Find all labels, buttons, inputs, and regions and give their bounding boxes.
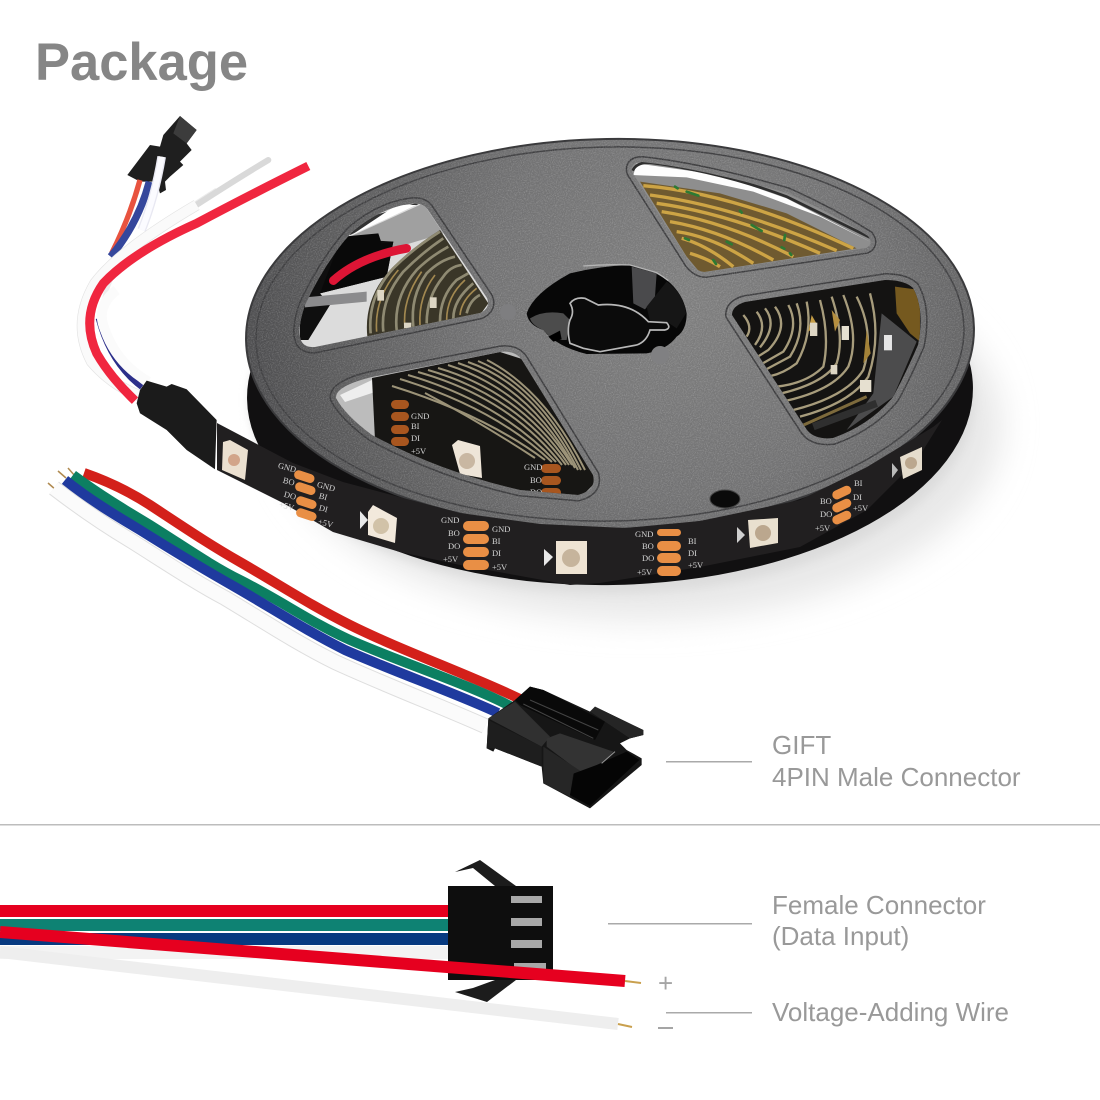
mounting hole <box>710 490 740 508</box>
strip solder pads and labels: GND <box>277 460 297 475</box>
strip solder pads and labels: GND <box>492 524 510 534</box>
strip solder pads and labels: BO <box>820 496 832 506</box>
wires <box>48 468 520 726</box>
strip solder pads and labels: DI <box>492 548 501 558</box>
strip solder pads and labels: DI <box>853 492 862 502</box>
inner strip pads: DI <box>411 433 420 443</box>
inner LED <box>452 440 482 478</box>
callout: male connector: 4PIN Male Connector <box>772 762 1021 792</box>
window: right <box>732 280 921 438</box>
strip solder pads and labels: GND <box>635 529 653 539</box>
inner strip pads: GND <box>411 411 429 421</box>
callout: female connector <box>608 890 986 951</box>
strip solder pads and labels: BI <box>854 478 863 488</box>
callout: male connector <box>666 730 1021 792</box>
strip solder pads and labels: +5V <box>492 562 508 572</box>
connector housing <box>448 860 553 1002</box>
reel body <box>244 195 976 591</box>
inner strip pads: GND <box>524 462 542 472</box>
strip solder pads and labels: +5V <box>443 554 459 564</box>
strip solder pads and labels: +5V <box>637 567 653 577</box>
strip solder pads and labels: DO <box>820 509 832 519</box>
short data wires <box>111 157 162 257</box>
window: lower left <box>336 352 594 495</box>
strip solder pads and labels: BO <box>448 528 460 538</box>
inner strip pads: +5V <box>411 446 427 456</box>
lead bundle <box>82 160 308 401</box>
minus sign <box>658 1027 673 1029</box>
spoke buttons <box>500 304 669 364</box>
parallel wires <box>0 905 450 959</box>
connector body <box>487 687 643 808</box>
strip solder pads and labels: BO <box>642 541 654 551</box>
connector housing <box>127 116 197 193</box>
strip solder pads and labels <box>277 460 869 577</box>
strip solder pads and labels: +5V <box>688 560 704 570</box>
strip solder pads and labels: +5V <box>853 503 869 513</box>
male connector with wires <box>48 468 643 808</box>
strip solder pads and labels: +5V <box>278 499 296 513</box>
window: top right <box>632 162 870 272</box>
strip solder pads and labels: DO <box>448 541 460 551</box>
inner strip pads: BI <box>411 421 420 431</box>
strip solder pads and labels: DO <box>283 489 297 502</box>
strip solder pads and labels: DI <box>688 548 697 558</box>
callout: male connector: GIFT <box>772 730 831 760</box>
strip solder pads and labels: DI <box>318 502 329 514</box>
callout: voltage wire: Voltage-Adding Wire <box>772 997 1009 1027</box>
reel centre hole <box>527 265 687 354</box>
callout: female connector: (Data Input) <box>772 921 909 951</box>
callout: female connector: Female Connector <box>772 890 986 920</box>
positive wire <box>0 932 641 983</box>
strip solder pads and labels: GND <box>441 515 459 525</box>
strip LEDs <box>222 440 922 574</box>
strip solder pads and labels: BI <box>688 536 697 546</box>
female connector and wires <box>0 860 641 1027</box>
strip solder pads and labels: GND <box>316 479 336 494</box>
strip solder pads and labels: +5V <box>815 523 831 533</box>
LED strip band <box>217 420 942 585</box>
strip solder pads and labels: DO <box>642 553 654 563</box>
pre-wired connector and leads <box>82 116 308 469</box>
strip solder pads and labels: BO <box>282 475 296 488</box>
inner strip pads: BO <box>530 475 542 485</box>
strip solder pads and labels: +5V <box>317 516 335 530</box>
inner strip pads: DO <box>530 487 542 497</box>
LED strip reel <box>217 133 1002 620</box>
plus sign: + <box>658 968 673 998</box>
heat shrink <box>137 381 217 469</box>
reel disc <box>243 133 977 535</box>
reel shadow <box>250 207 1002 620</box>
inner strip pads <box>391 400 561 497</box>
strip solder pads and labels: BI <box>492 536 501 546</box>
strip solder pads and labels: BI <box>318 490 329 502</box>
negative wire <box>0 952 632 1027</box>
window: upper left <box>300 204 488 348</box>
title: Package <box>35 33 248 92</box>
